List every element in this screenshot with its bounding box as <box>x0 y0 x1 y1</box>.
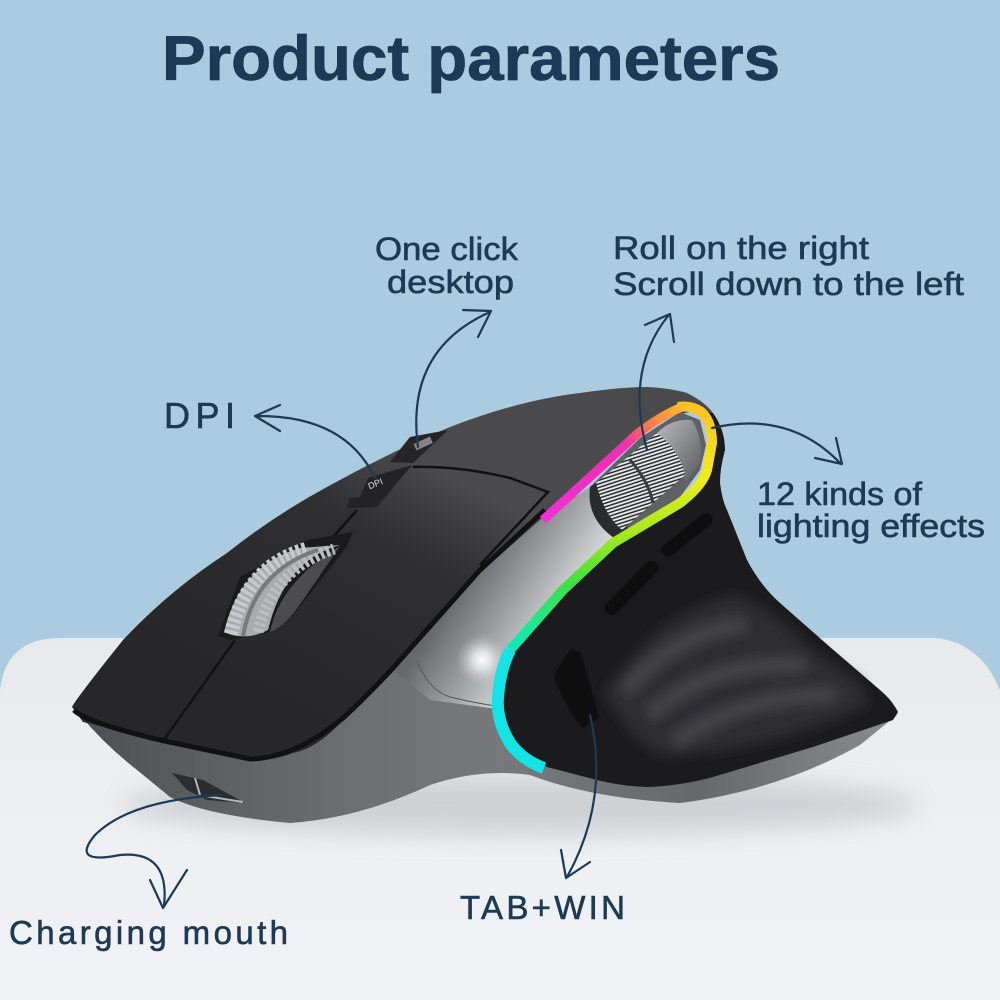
lighting strip: magenta <box>543 407 682 520</box>
wheel knurl <box>596 433 685 530</box>
mouse shadow <box>120 775 920 835</box>
label: Charging mouth: Charging mouth <box>9 914 288 951</box>
wheel silver band <box>224 545 340 637</box>
label: 12 kinds of lighting effects <box>757 476 985 544</box>
label: One click desktop <box>375 231 519 300</box>
silver body highlights <box>417 634 508 706</box>
label: TAB+WIN: TAB+WIN <box>460 889 625 926</box>
label: Roll on the right: Roll on the right <box>613 230 869 266</box>
label: One click desktop: One click <box>375 231 519 267</box>
thumb ripples <box>603 595 868 755</box>
label: 12 kinds of lighting effects: 12 kinds of <box>757 476 922 512</box>
title: Product parameters <box>162 24 780 94</box>
desk surface <box>0 638 1000 1000</box>
arrow: TAB+WIN <box>561 715 596 878</box>
label: Roll on the right <box>613 230 964 302</box>
arrow: Charging mouth <box>87 795 222 908</box>
arrow: Roll <box>640 314 674 450</box>
black thumb panel <box>498 410 898 787</box>
wheel slot <box>218 532 353 640</box>
lighting strip: rainbow <box>498 406 712 768</box>
label: DPI: DPI <box>164 395 235 436</box>
label: 12 kinds of lighting effects: lighting effects <box>757 508 985 544</box>
mouse illustration <box>72 387 920 835</box>
side button 1 <box>612 568 651 608</box>
wheel teeth <box>231 549 306 634</box>
arrow: One click desktop <box>416 310 491 447</box>
mouse silver body <box>80 495 897 823</box>
wheel cavity <box>590 412 706 535</box>
top shell <box>72 387 713 760</box>
silver upper panel <box>393 487 617 710</box>
side wheel dome <box>657 420 701 482</box>
charging port <box>172 773 245 803</box>
wheel shadow <box>270 546 340 632</box>
desktop button <box>390 430 448 463</box>
DPI button: DPI <box>367 476 384 491</box>
side wheel <box>590 433 685 538</box>
button split lines <box>163 467 548 741</box>
shell lower rim <box>74 510 545 759</box>
TAB WIN button <box>555 650 598 727</box>
side button 2 <box>668 520 706 550</box>
label: Roll on the right: Scroll down to the left <box>613 266 964 302</box>
arrow: lighting <box>712 424 842 464</box>
main scroll wheel <box>218 532 353 640</box>
label: One click desktop: desktop <box>387 264 514 300</box>
arrow: DPI <box>255 405 375 478</box>
wheel end cap <box>590 480 628 538</box>
DPI button <box>347 465 412 508</box>
